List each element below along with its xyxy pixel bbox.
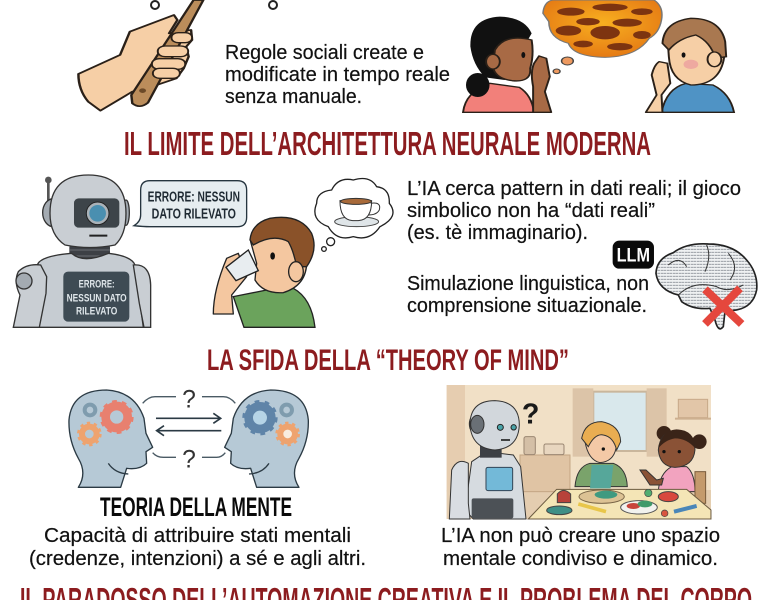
text block: pattern in dati reali: L’IA cerca pattern in dati reali; il gioco bbox=[407, 178, 741, 200]
text block: spazio mentale bbox=[441, 525, 720, 570]
illustration: robot with error bbox=[13, 175, 393, 327]
LLM badge bbox=[613, 241, 654, 269]
girl bbox=[640, 426, 707, 492]
red cross bbox=[705, 288, 742, 324]
arrows between heads bbox=[156, 413, 221, 436]
text block: capacita: Capacità di attribuire stati mentali bbox=[44, 525, 351, 547]
LLM badge: LLM bbox=[617, 246, 650, 267]
question connectors bbox=[143, 386, 235, 473]
robot mouth bbox=[89, 233, 107, 239]
speech bubble: ERRORE: NESSUN bbox=[148, 190, 240, 206]
text block: spazio mentale: mentale condiviso e dinamico. bbox=[443, 548, 718, 570]
robot chest screen: ERRORE: bbox=[79, 278, 115, 290]
boy bbox=[646, 18, 734, 112]
robot right shoulder bbox=[133, 265, 151, 327]
text block: regole sociali: Regole sociali create e bbox=[225, 42, 424, 64]
thought cloud with cup bbox=[315, 178, 393, 251]
right head bbox=[225, 390, 308, 487]
robot ears bbox=[43, 199, 129, 227]
text block: regole sociali: senza manuale. bbox=[225, 86, 362, 108]
text block: regole sociali: modificate in tempo reale bbox=[225, 64, 450, 86]
robot torso bbox=[37, 253, 143, 327]
text block: pattern in dati reali: (es. tè immaginario). bbox=[407, 222, 588, 244]
text block: regole sociali bbox=[225, 42, 450, 108]
text block: spazio mentale: L’IA non può creare uno spazio bbox=[441, 525, 720, 547]
speech bubble: DATO RILEVATO bbox=[152, 206, 236, 222]
icon: bubble dot left bbox=[151, 1, 159, 9]
boy bbox=[575, 422, 627, 488]
robot antenna bbox=[45, 177, 52, 202]
left head bbox=[69, 390, 153, 487]
shelf bbox=[675, 399, 711, 420]
chair bbox=[695, 472, 706, 503]
robot chest screen bbox=[63, 272, 129, 322]
robot: ? bbox=[522, 398, 539, 430]
illustration: two heads theory of mind bbox=[69, 386, 308, 487]
text block: pattern in dati reali: simbolico non ha “dati reali” bbox=[407, 200, 655, 222]
lava thought bubble bbox=[543, 0, 662, 74]
robot joint bbox=[16, 273, 32, 289]
text block: capacita bbox=[29, 525, 366, 570]
text block: simulazione linguistica: Simulazione linguistica, non bbox=[407, 273, 649, 295]
icon: LLM brain with cross bbox=[613, 241, 757, 329]
text block: simulazione linguistica: comprensione situazionale. bbox=[407, 295, 647, 317]
icon: bubble dot right bbox=[269, 1, 277, 9]
floor bbox=[447, 490, 711, 519]
text block: simulazione linguistica bbox=[407, 273, 649, 317]
window bbox=[573, 388, 667, 457]
boy drinking bbox=[213, 217, 315, 327]
speech bubble bbox=[134, 181, 247, 227]
question connectors: ? bbox=[182, 446, 196, 473]
robot visor bbox=[74, 198, 119, 228]
illustration: children whispering with lava thought bbox=[463, 0, 734, 112]
icon: hand holding stick bbox=[78, 0, 203, 111]
robot neck bbox=[69, 244, 110, 264]
robot bbox=[449, 398, 539, 519]
girl bbox=[463, 17, 551, 112]
room wall bbox=[447, 385, 711, 519]
robot left arm bbox=[13, 265, 47, 327]
subheading: teoria della mente: TEORIA DELLA MENTE bbox=[100, 492, 292, 522]
robot chest screen: RILEVATO bbox=[76, 305, 117, 317]
heading: theory of mind: LA SFIDA DELLA “THEORY OF MIND” bbox=[207, 344, 569, 377]
robot chest screen: NESSUN DATO bbox=[67, 293, 127, 305]
illustration: robot and children playing bbox=[447, 385, 711, 519]
question connectors: ? bbox=[182, 386, 196, 413]
text block: pattern in dati reali bbox=[407, 178, 741, 244]
text block: capacita: (credenze, intenzioni) a sé e agli altri. bbox=[29, 548, 366, 570]
brain bbox=[656, 244, 757, 329]
cabinet with pot bbox=[520, 437, 570, 492]
table with clay bbox=[528, 489, 711, 519]
robot head bbox=[50, 175, 126, 247]
wall column bbox=[447, 385, 465, 492]
